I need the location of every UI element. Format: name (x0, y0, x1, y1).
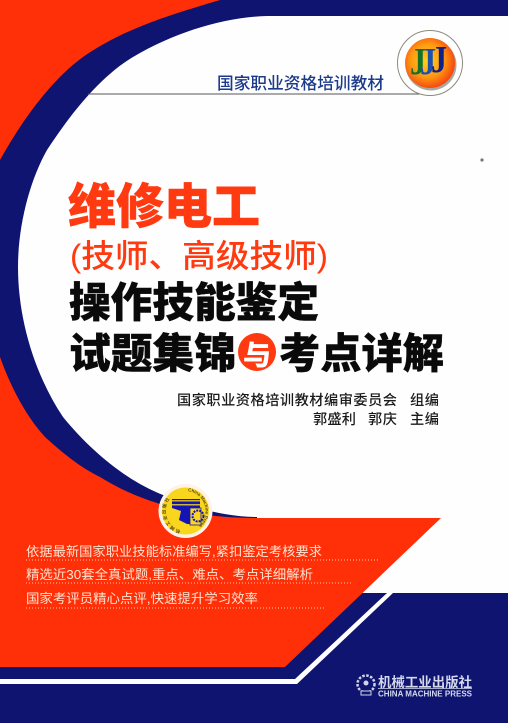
white diagonal stripe (0, 593, 393, 684)
authors: 郭庆 (368, 411, 397, 428)
authors (177, 392, 439, 428)
title line with badge: 试题集锦 (69, 330, 236, 377)
feature two: 精选近30套全真试题,重点、难点、考点详细解析 (26, 567, 313, 582)
title line with badge: 与 (243, 340, 271, 371)
icon: series logo: J (410, 41, 426, 83)
navy curved band (0, 0, 508, 519)
publisher logo (358, 674, 472, 698)
icon: series logo: J (420, 41, 436, 83)
feature one: 依据最新国家职业技能标准编写,紧扣鉴定考核要求 (26, 544, 322, 559)
series title: 国家职业资格培训教材 (217, 73, 384, 93)
publisher name (378, 674, 472, 698)
red lower panel (0, 357, 441, 667)
icon: publisher badge: 机 械 工 业 出 版 社 (162, 498, 180, 534)
authors: 组编 (410, 393, 439, 409)
publisher name: 机械工业出版社 (378, 674, 472, 690)
red top-left corner (0, 0, 220, 160)
main title: red: 维修电工 (68, 181, 260, 234)
authors: 国家职业资格培训教材编审委员会 (177, 392, 397, 409)
authors: 主编 (410, 412, 439, 428)
publisher name: CHINA MACHINE PRESS (378, 688, 472, 698)
navy bottom block (0, 593, 508, 723)
feature list (26, 544, 378, 608)
title line: black: 操作技能鉴定 (69, 279, 319, 326)
title line with badge: 考点详解 (279, 330, 444, 377)
speck (480, 158, 484, 162)
title line with badge (69, 330, 444, 377)
subtitle: red: (技师、高级技师) (70, 238, 328, 274)
series rule line (88, 93, 420, 95)
icon: series logo: J (431, 39, 447, 81)
authors: 郭盛利 (313, 411, 356, 428)
feature three: 国家考评员精心点评,快速提升学习效率 (26, 591, 258, 606)
icon: series logo (398, 30, 462, 96)
icon: gear (358, 676, 374, 695)
icon: publisher badge: China Machine Press (188, 488, 209, 528)
icon: publisher badge (158, 484, 212, 538)
